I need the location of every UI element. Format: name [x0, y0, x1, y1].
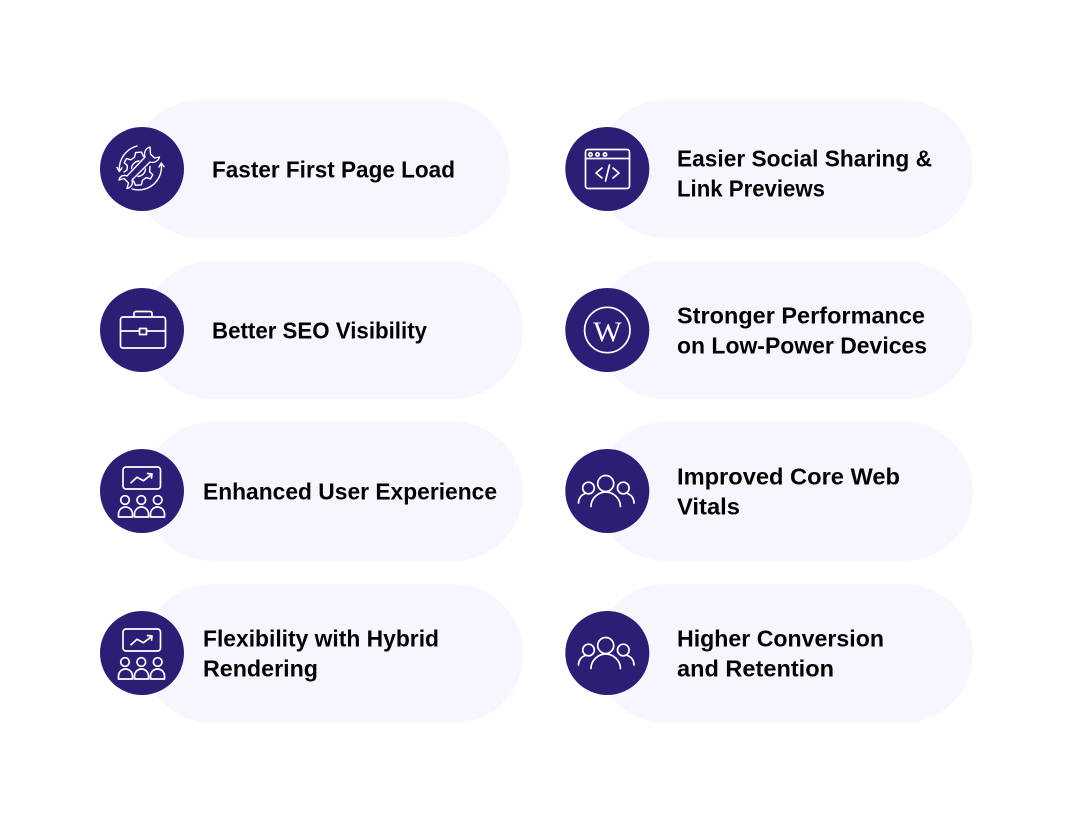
icon: audience with chart [118, 629, 164, 679]
label: Faster First Page Load [212, 156, 455, 182]
label: and Retention [677, 655, 834, 681]
label [677, 626, 884, 681]
panel: Easier Social Sharing and Link Previews [565, 100, 973, 238]
icon: WordPress logo: W [593, 318, 622, 348]
icon: group of people [578, 638, 634, 668]
icon: briefcase [120, 312, 166, 348]
icon: browser code window [586, 150, 630, 188]
label: Link Previews [677, 175, 825, 201]
label: Enhanced User Experience [203, 478, 497, 504]
icon: WordPress logo [585, 307, 630, 353]
label: Easier Social Sharing & [677, 146, 932, 172]
label [677, 464, 900, 519]
label: on Low-Power Devices [677, 332, 927, 358]
panel: Higher Conversion and Retention [565, 584, 973, 723]
label: Better SEO Visibility [212, 317, 427, 343]
panel: Enhanced User Experience [100, 422, 523, 561]
panel: Better SEO Visibility [100, 261, 523, 399]
panel: Stronger Performance on Low-Power Devices [565, 261, 973, 399]
label: Higher Conversion [677, 626, 884, 652]
panel: Improved Core Web Vitals [565, 422, 973, 561]
label: Rendering [203, 656, 318, 682]
icon: group of people [578, 476, 634, 506]
label: Vitals [677, 493, 740, 519]
label: Flexibility with Hybrid [203, 626, 439, 652]
panel: Faster First Page Load [100, 100, 510, 238]
label [677, 302, 927, 358]
label [203, 626, 439, 682]
label: Improved Core Web [677, 464, 900, 490]
panel: Flexibility with Hybrid Rendering [100, 584, 523, 723]
icon: audience with chart [118, 467, 164, 517]
icon: gear and wrench [117, 146, 164, 190]
label [677, 146, 932, 201]
label: Stronger Performance [677, 302, 925, 328]
